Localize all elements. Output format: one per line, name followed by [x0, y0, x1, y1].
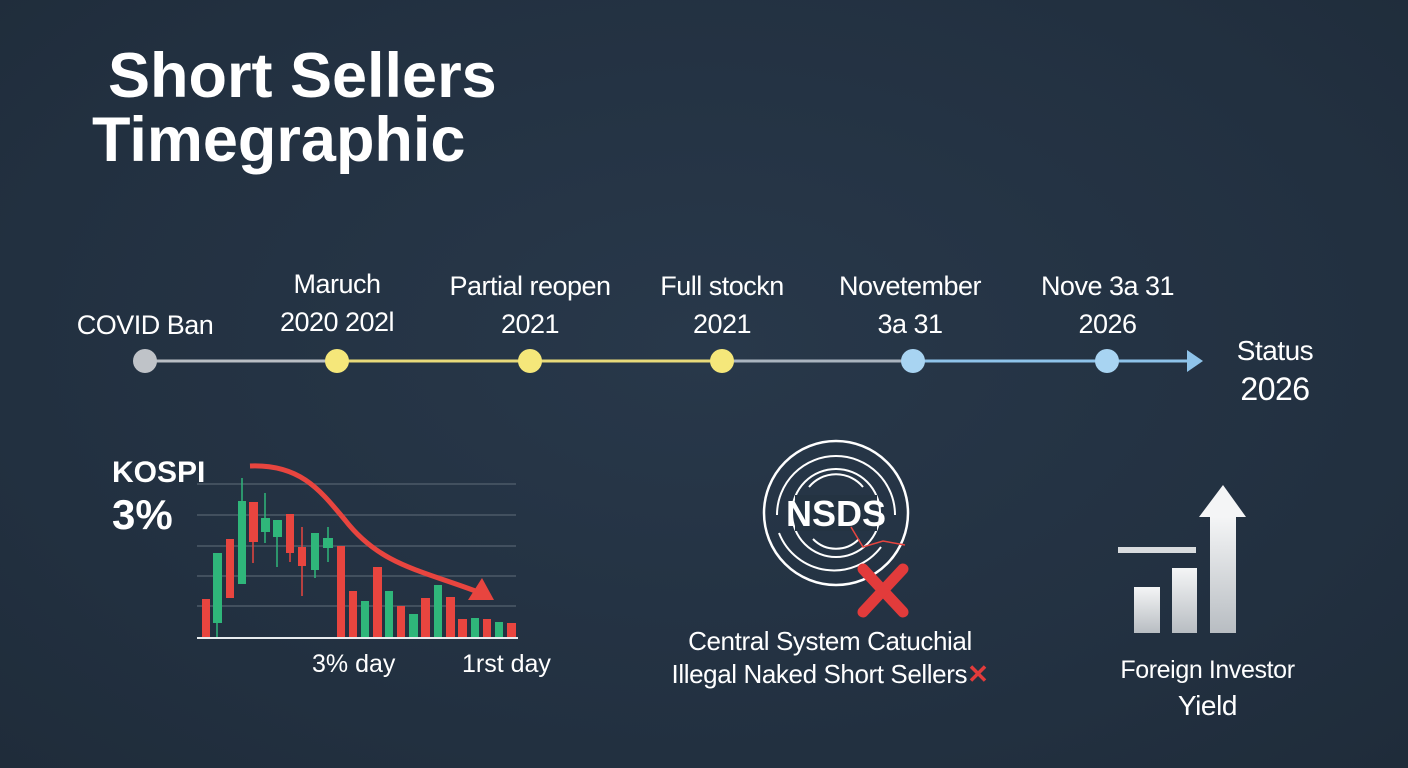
foreign investor caption: Yield	[1178, 690, 1237, 721]
foreign investor caption	[1120, 656, 1295, 721]
timeline labels: 3a 31	[877, 309, 943, 339]
icon: NSDS	[762, 440, 910, 618]
NSDS caption: Illegal Naked Short Sellers✕	[672, 659, 988, 689]
timeline labels: 2021	[501, 309, 559, 339]
KOSPI label: KOSPI	[112, 456, 205, 489]
title: Timegraphic	[92, 105, 465, 175]
icon: growth bars	[1118, 485, 1246, 633]
timeline labels: 2020 202l	[280, 307, 394, 337]
timeline labels	[77, 269, 1313, 407]
KOSPI label	[112, 456, 205, 538]
timeline labels: Full stockn	[660, 271, 784, 301]
icon: NSDS: NSDS	[786, 493, 886, 534]
title	[92, 41, 497, 175]
chart label 2: 1rst day	[462, 650, 551, 678]
timeline labels: Nove 3a 31	[1041, 271, 1174, 301]
arrow: decline	[250, 466, 494, 600]
KOSPI label: 3%	[112, 491, 173, 538]
timeline labels: Maruch	[293, 269, 381, 299]
chart labels: 3% day	[312, 650, 395, 678]
timeline labels: 2026	[1078, 309, 1137, 339]
foreign investor caption: Foreign Investor	[1120, 656, 1295, 684]
timeline labels: Novetember	[839, 271, 981, 301]
timeline labels: 2026	[1240, 371, 1310, 407]
timeline labels: Partial reopen	[449, 271, 611, 301]
timeline labels: Status	[1237, 335, 1313, 366]
NSDS caption: Central System Catuchial	[688, 626, 972, 656]
timeline labels: COVID Ban	[77, 310, 213, 340]
title: Short Sellers	[108, 41, 497, 111]
NSDS caption	[672, 626, 988, 689]
timeline labels: 2021	[693, 309, 751, 339]
